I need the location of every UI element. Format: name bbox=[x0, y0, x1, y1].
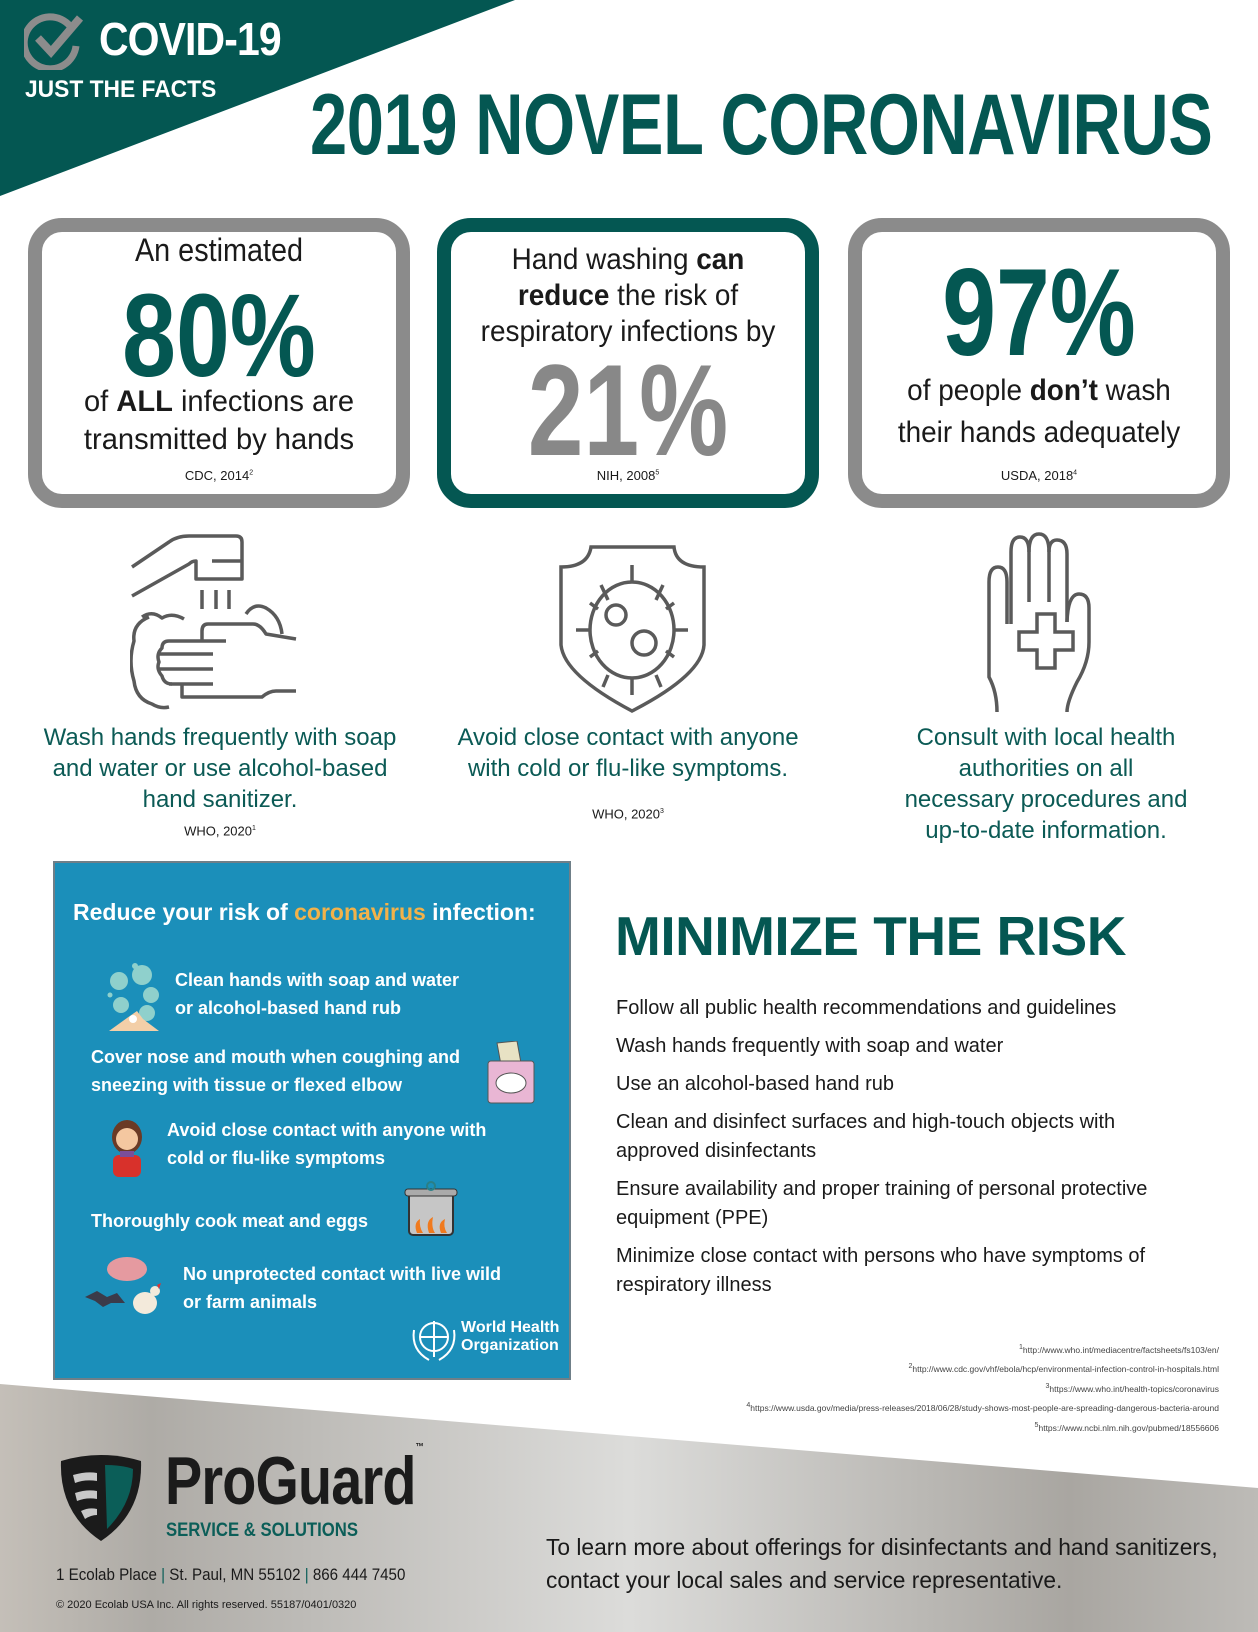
text: consult authorities: up-to-date information. bbox=[925, 817, 1167, 844]
text: wash hands: and water or use alcohol-based bbox=[53, 755, 387, 782]
icon: hand with cross bbox=[987, 532, 1091, 712]
address: 1 Ecolab Place | St. Paul, MN 55102 | 866 444 7450 bbox=[56, 1565, 405, 1584]
call to action: To learn more about offerings for disinfectants and hand sanitizers, bbox=[546, 1534, 1218, 1560]
icon: check circle bbox=[24, 13, 83, 70]
WHO logo: World Health bbox=[461, 1319, 559, 1336]
icon: virus shield bbox=[559, 545, 706, 713]
text: avoid contact: Avoid close contact with anyone bbox=[457, 724, 799, 751]
big number 97%: 97% bbox=[942, 244, 1136, 382]
copyright: © 2020 Ecolab USA Inc. All rights reserved. 55187/0401/0320 bbox=[56, 1599, 356, 1611]
list: minimize the risk: Minimize close contact with persons who have symptoms of bbox=[616, 1245, 1145, 1267]
stat box 2: NIH, 20085 bbox=[597, 468, 659, 483]
text: avoid contact bbox=[457, 724, 799, 821]
list: minimize the risk: Wash hands frequently with soap and water bbox=[616, 1035, 1003, 1057]
WHO item 1 bbox=[175, 970, 459, 1018]
list: minimize the risk: equipment (PPE) bbox=[616, 1207, 768, 1229]
stat box 2: reduce the risk of bbox=[518, 279, 738, 312]
text: wash hands: WHO, 20201 bbox=[184, 823, 256, 838]
header banner bbox=[0, 0, 515, 196]
title: 2019 NOVEL CORONAVIRUS bbox=[310, 77, 1212, 173]
stat box 2 bbox=[437, 218, 819, 508]
list: minimize the risk: Clean and disinfect surfaces and high-touch objects with bbox=[616, 1111, 1115, 1133]
WHO item 1: or alcohol-based hand rub bbox=[175, 998, 401, 1018]
list: minimize the risk: Ensure availability and proper training of personal protective bbox=[616, 1178, 1147, 1200]
text: wash hands: Wash hands frequently with soap bbox=[44, 724, 396, 751]
text: consult authorities bbox=[905, 724, 1187, 844]
stat box 3 bbox=[848, 218, 1230, 508]
footnotes: 3https://www.who.int/health-topics/coronavirus bbox=[1045, 1382, 1219, 1394]
icon: animals bbox=[85, 1257, 161, 1314]
stat box 1: An estimated bbox=[135, 232, 303, 268]
WHO item 3 bbox=[167, 1120, 486, 1168]
WHO logo: Organization bbox=[461, 1337, 559, 1354]
JUST THE FACTS label: JUST THE FACTS bbox=[25, 76, 216, 103]
stat box 1 bbox=[28, 218, 410, 508]
list: minimize the risk bbox=[616, 997, 1147, 1296]
text: wash hands: hand sanitizer. bbox=[143, 786, 297, 813]
list: minimize the risk: Follow all public health recommendations and guidelines bbox=[616, 997, 1116, 1019]
icon: hand washing bbox=[130, 534, 296, 710]
text: wash hands bbox=[44, 724, 396, 838]
icon: soap bubbles bbox=[108, 963, 159, 1031]
logo: ProGuard shield bbox=[60, 1455, 142, 1541]
stat box 2: Hand washing can bbox=[512, 243, 744, 276]
WHO item 1: Clean hands with soap and water bbox=[175, 970, 459, 990]
list: minimize the risk: Use an alcohol-based hand rub bbox=[616, 1073, 894, 1095]
heading: minimize the risk: MINIMIZE THE RISK bbox=[615, 905, 1126, 967]
stat box 1: CDC, 20142 bbox=[185, 468, 253, 483]
WHO item 5: No unprotected contact with live wild bbox=[183, 1264, 501, 1284]
text: avoid contact: with cold or flu-like symptoms. bbox=[468, 755, 788, 782]
footnotes: 2http://www.cdc.gov/vhf/ebola/hcp/environmental-infection-control-in-hospitals.html bbox=[908, 1362, 1219, 1374]
icon: tissue box bbox=[488, 1041, 534, 1104]
footer band bbox=[0, 1384, 1258, 1632]
list: minimize the risk: respiratory illness bbox=[616, 1274, 772, 1296]
WHO item 4: Thoroughly cook meat and eggs bbox=[91, 1211, 368, 1231]
text: consult authorities: necessary procedures and bbox=[905, 786, 1187, 813]
text: consult authorities: Consult with local health bbox=[917, 724, 1175, 751]
list: minimize the risk: approved disinfectants bbox=[616, 1140, 816, 1162]
WHO heading: Reduce your risk of coronavirus infection: bbox=[73, 899, 536, 925]
call to action bbox=[546, 1534, 1218, 1593]
text: consult authorities: authorities on all bbox=[959, 755, 1133, 782]
call to action: contact your local sales and service representative. bbox=[546, 1567, 1062, 1593]
footnotes: 1http://www.who.int/mediacentre/factsheets/fs103/en/ bbox=[1019, 1343, 1219, 1355]
logo: ProGuard wordmark: ProGuard™ bbox=[165, 1442, 423, 1519]
WHO item 2: sneezing with tissue or flexed elbow bbox=[91, 1075, 402, 1095]
WHO item 3: Avoid close contact with anyone with bbox=[167, 1120, 486, 1140]
footnotes: 4https://www.usda.gov/media/press-releases/2018/06/28/study-shows-most-people-are-spreading-dangerous-bacteria-around bbox=[746, 1401, 1219, 1413]
WHO item 2 bbox=[91, 1047, 460, 1095]
icon: cooking pot bbox=[404, 1181, 458, 1236]
logo: service & solutions: SERVICE & SOLUTIONS bbox=[166, 1520, 358, 1541]
icon: sick person bbox=[112, 1120, 142, 1177]
stat box 2: respiratory infections by bbox=[481, 315, 775, 348]
WHO item 2: Cover nose and mouth when coughing and bbox=[91, 1047, 460, 1067]
stat box 3: USDA, 20184 bbox=[1001, 468, 1077, 483]
panel: WHO reduce your risk bbox=[53, 861, 571, 1380]
stat box 3: their hands adequately bbox=[898, 416, 1180, 449]
text: avoid contact: WHO, 20203 bbox=[592, 806, 664, 821]
stat box 1: of ALL infections are bbox=[84, 385, 354, 418]
big number 80%: 80% bbox=[122, 270, 316, 402]
WHO item 3: cold or flu-like symptoms bbox=[167, 1148, 385, 1168]
footnotes: 5https://www.ncbi.nlm.nih.gov/pubmed/18556606 bbox=[1035, 1421, 1219, 1433]
big number 21%: 21% bbox=[528, 337, 728, 483]
footnotes bbox=[746, 1343, 1219, 1433]
stat box 3: of people don’t wash bbox=[907, 374, 1171, 407]
WHO item 5 bbox=[183, 1264, 501, 1312]
COVID-19 label: COVID-19 bbox=[99, 13, 281, 65]
WHO item 5: or farm animals bbox=[183, 1292, 317, 1312]
stat box 1: transmitted by hands bbox=[84, 423, 354, 456]
WHO logo bbox=[412, 1319, 559, 1361]
